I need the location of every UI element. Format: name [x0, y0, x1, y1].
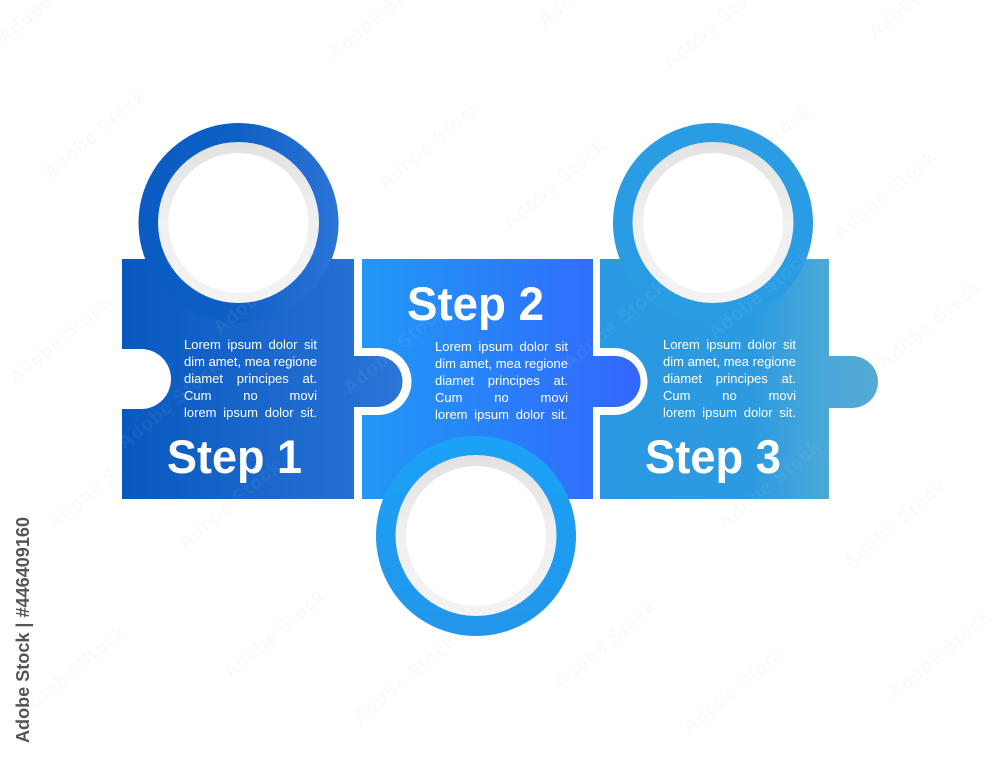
text: Adobe Stock [115, 356, 226, 454]
text block: step 3: diamet principes at. [663, 371, 796, 386]
text block: step 2: diamet principes at. [435, 373, 568, 388]
icon placeholder circle: step 3 [613, 123, 813, 323]
text block: step 1: diamet principes at. [184, 371, 317, 386]
tab: step 1 [354, 356, 402, 407]
text block: step 3: Lorem ipsum dolor sit [663, 337, 796, 352]
text: Adobe Stock [500, 136, 611, 234]
heading: step 1: Step 1 [167, 430, 302, 483]
text block: step 3: lorem ipsum dolor sit. [663, 405, 796, 420]
puzzle piece: step 3 [600, 259, 878, 499]
text block: step 3 [663, 336, 797, 422]
text block: step 2: dim amet, mea regione [435, 356, 568, 371]
text: Adobe Stock [210, 241, 321, 339]
text block: step 1: Lorem ipsum dolor sit [184, 337, 317, 352]
icon placeholder circle: step 2 [376, 436, 576, 636]
text: Adobe Stock [220, 586, 331, 684]
stock image id label: Adobe Stock | #446409160 [13, 517, 33, 743]
tab: step 2 [593, 356, 640, 407]
text: Adobe Stock [20, 621, 131, 719]
text block: step 1: lorem ipsum dolor sit. [184, 405, 317, 420]
puzzle piece: step 1 [122, 259, 354, 499]
text block: step 1 [184, 336, 318, 422]
text: Adobe Stock [45, 436, 156, 534]
text block: step 2: Cum no movi [435, 390, 568, 405]
text: Adobe Stock [705, 101, 816, 199]
text: Adobe Stock [705, 246, 816, 344]
text: Adobe Stock [350, 631, 461, 729]
tab outline: step 1 [354, 348, 412, 415]
text: Adobe Stock [560, 276, 671, 374]
text: Adobe Stock [375, 96, 486, 194]
panel: step 1 [122, 123, 412, 499]
text block: step 3: dim amet, mea regione [663, 354, 796, 369]
text block: step 2 [435, 338, 569, 424]
tab outline: step 2 [593, 348, 648, 415]
text: Adobe Stock [375, 96, 486, 194]
text: Adobe Stock [500, 136, 611, 234]
icon placeholder circle: step 1 [138, 123, 338, 323]
text: Adobe Stock [715, 436, 826, 534]
heading: step 2: Step 2 [407, 277, 544, 330]
text: Adobe Stock [550, 596, 661, 694]
text block: step 2: Lorem ipsum dolor sit [435, 339, 568, 354]
text: Adobe Stock [840, 476, 951, 574]
panel: step 3 [600, 123, 878, 499]
text: Adobe Stock [340, 301, 451, 399]
text: Adobe Stock [175, 456, 286, 554]
text: Adobe Stock [40, 86, 151, 184]
puzzle piece: step 2 [362, 259, 593, 499]
text: Adobe Stock [875, 276, 986, 374]
text block: step 3: Cum no movi [663, 388, 796, 403]
text: Adobe Stock [5, 291, 116, 389]
text: Adobe Stock [885, 606, 996, 704]
text block: step 2: lorem ipsum dolor sit. [435, 407, 568, 422]
text: Adobe Stock [715, 436, 826, 534]
text: Adobe Stock [40, 86, 151, 184]
text: Adobe Stock [175, 456, 286, 554]
panel: step 2 [362, 259, 648, 636]
text block: step 1: dim amet, mea regione [184, 354, 317, 369]
text block: step 1: Cum no movi [184, 388, 317, 403]
heading: step 3: Step 3 [645, 430, 781, 483]
text: Adobe Stock [830, 146, 941, 244]
text: Adobe Stock [680, 641, 791, 739]
